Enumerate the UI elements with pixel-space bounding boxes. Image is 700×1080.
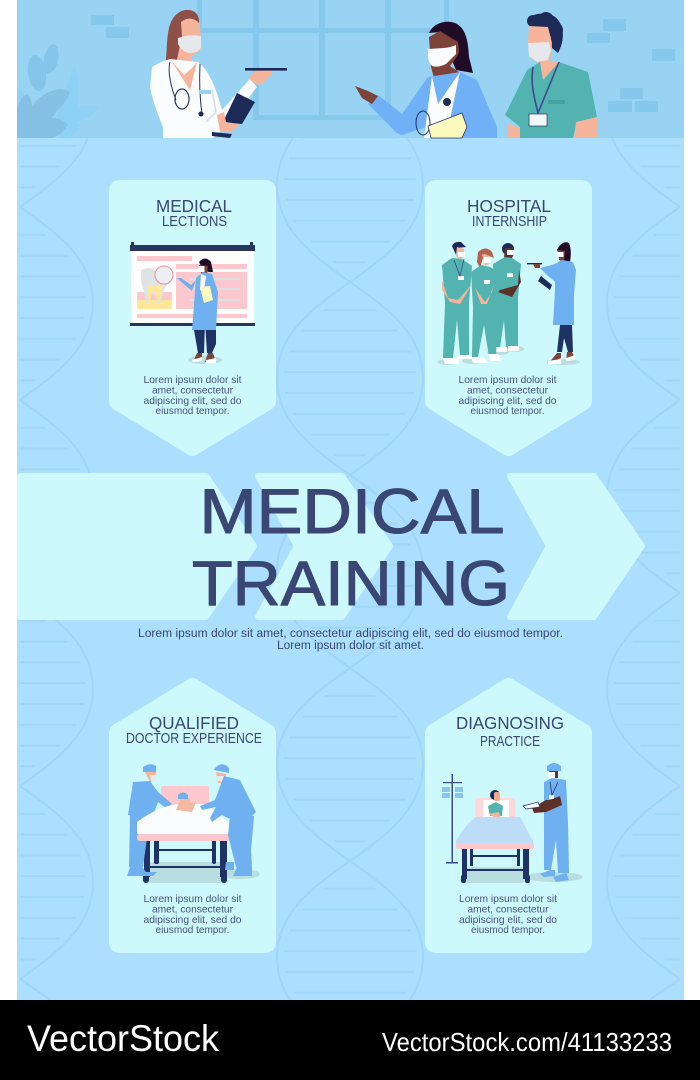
heading: qualified doctor experience: QUALIFIED	[149, 713, 239, 733]
intern 1	[442, 242, 472, 364]
illustration: surgeons at operating table	[127, 764, 260, 883]
text: description: Lorem ipsum dolor sit	[144, 375, 242, 386]
panel: qualified doctor experience	[109, 678, 276, 953]
heading: hospital internship	[467, 196, 551, 230]
text: description: Lorem ipsum dolor sit	[144, 894, 242, 905]
text: description: amet, consectetur	[467, 386, 549, 396]
subtitle: Lorem ipsum dolor sit amet.	[277, 640, 424, 652]
text: description: eiusmod tempor.	[471, 925, 545, 936]
nurse in green scrubs	[505, 12, 597, 138]
icon: IV stand	[442, 774, 463, 864]
right surgeon	[200, 764, 256, 876]
panel: diagnosing practice	[425, 678, 592, 953]
title	[192, 477, 510, 619]
text: description	[458, 375, 557, 417]
text: description	[459, 894, 557, 936]
heading: medical lections: LECTIONS	[162, 214, 227, 230]
heading: hospital internship: INTERNSHIP	[472, 214, 547, 230]
text: description: amet, consectetur	[152, 904, 234, 916]
text: description: amet, consectetur	[468, 904, 549, 916]
intern 2	[471, 248, 501, 363]
illustration: doctor at patient's bedside	[442, 763, 583, 883]
illustration: lecturer at tooth chart	[130, 242, 255, 364]
standing doctor	[523, 763, 569, 882]
subtitle: Lorem ipsum dolor sit amet, consectetur adipiscing elit, sed do eiusmod tempor.	[138, 628, 563, 640]
panel: medical lections	[109, 180, 276, 456]
wall bricks	[91, 15, 675, 112]
text: description: Lorem ipsum dolor sit	[459, 894, 557, 905]
text: description: eiusmod tempor.	[470, 406, 544, 417]
heading: medical lections: MEDICAL	[156, 196, 232, 216]
intern 3	[493, 243, 521, 352]
text: description: amet, consectetur	[152, 386, 234, 396]
illustration: interns and doctor	[437, 242, 580, 365]
footer image id: VectorStock.com/41133233	[382, 1027, 672, 1057]
text: description: adipiscing elit, sed do	[458, 396, 557, 407]
heading: hospital internship: HOSPITAL	[467, 196, 551, 216]
text: description: adipiscing elit, sed do	[144, 915, 242, 926]
patient on table	[137, 792, 233, 841]
panel: hospital internship	[425, 180, 592, 456]
heading: qualified doctor experience	[126, 713, 262, 747]
footer brand: VectorStock	[27, 1018, 219, 1059]
header scene: three medical workers	[17, 0, 684, 138]
footer watermark bar	[0, 1000, 700, 1080]
left surgeon	[127, 764, 172, 876]
doctor with clipboard	[527, 242, 576, 364]
text: description: Lorem ipsum dolor sit	[458, 375, 557, 386]
text: description: adipiscing elit, sed do	[459, 915, 557, 926]
text: description: eiusmod tempor.	[156, 406, 230, 417]
heading: medical lections	[156, 196, 232, 230]
text: description	[144, 894, 242, 936]
subtitle	[138, 628, 563, 652]
icon: potted plant leaves	[17, 43, 99, 138]
child patient	[488, 790, 503, 820]
heading: diagnosing practice: DIAGNOSING	[456, 713, 564, 733]
text: description: eiusmod tempor.	[156, 925, 230, 936]
heading: qualified doctor experience: DOCTOR EXPERIENCE	[126, 731, 262, 747]
title: MEDICAL	[200, 477, 504, 547]
window frame	[197, 0, 449, 120]
text: description	[144, 375, 242, 417]
doctor in white coat	[150, 10, 287, 138]
heading: diagnosing practice: PRACTICE	[480, 734, 540, 750]
chevron arrows behind title	[20, 476, 642, 617]
doctor in blue coat	[355, 22, 497, 138]
text: description: adipiscing elit, sed do	[144, 396, 242, 407]
title: TRAINING	[192, 549, 510, 619]
heading: diagnosing practice	[456, 713, 564, 750]
